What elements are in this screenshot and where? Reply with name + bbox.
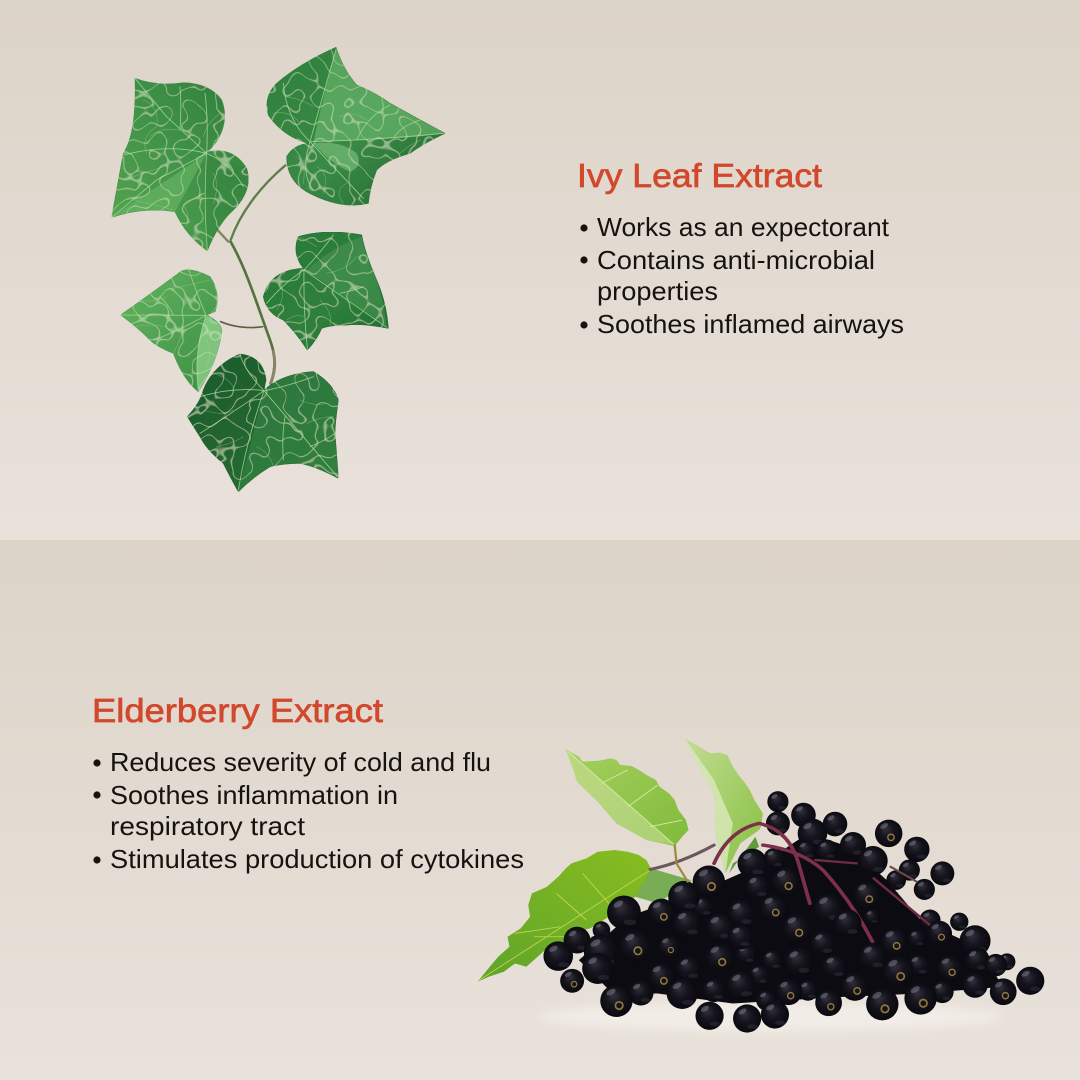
- leaf: top left: [566, 749, 689, 846]
- ivy leaf: top left: [112, 78, 248, 251]
- list: ivy leaf benefits: Soothes inflamed airways: [597, 309, 904, 339]
- berry cluster mass: [579, 833, 1003, 1003]
- list: ivy leaf benefits: [580, 212, 904, 339]
- list: ivy leaf benefits: properties: [597, 276, 718, 306]
- stems: [650, 823, 930, 942]
- illustration: ivy sprig: [112, 47, 445, 492]
- ivy leaf: bottom: [187, 354, 338, 492]
- ground highlight: [538, 1002, 1003, 1032]
- panel: ivy leaf background: [0, 0, 1080, 540]
- ivy leaf: top right: [267, 47, 445, 205]
- list: elderberry benefits: Soothes inflammation in: [110, 780, 398, 810]
- panel: elderberry background: [0, 540, 1080, 1080]
- leaf: top centre: [685, 738, 763, 873]
- leaf: lower left: [478, 850, 692, 982]
- list: ivy leaf benefits: Contains anti-microbial: [597, 245, 875, 275]
- ivy leaf: middle right: [263, 232, 388, 350]
- list: elderberry benefits: respiratory tract: [110, 811, 306, 841]
- heading: Ivy Leaf Extract: Ivy Leaf Extract: [577, 157, 822, 194]
- ivy stems: [216, 165, 285, 383]
- berries: front layer: [543, 849, 1044, 1033]
- berries: back layer: [564, 791, 1015, 1003]
- list: ivy leaf benefits: Works as an expectorant: [597, 212, 890, 242]
- list: elderberry benefits: Stimulates production of cytokines: [110, 844, 524, 874]
- ivy leaf: middle left: [121, 268, 222, 392]
- heading: Elderberry Extract: Elderberry Extract: [92, 692, 383, 729]
- list: elderberry benefits: [93, 747, 524, 874]
- list: elderberry benefits: Reduces severity of cold and flu: [110, 747, 491, 777]
- illustration: elderberry cluster: [478, 738, 1044, 1033]
